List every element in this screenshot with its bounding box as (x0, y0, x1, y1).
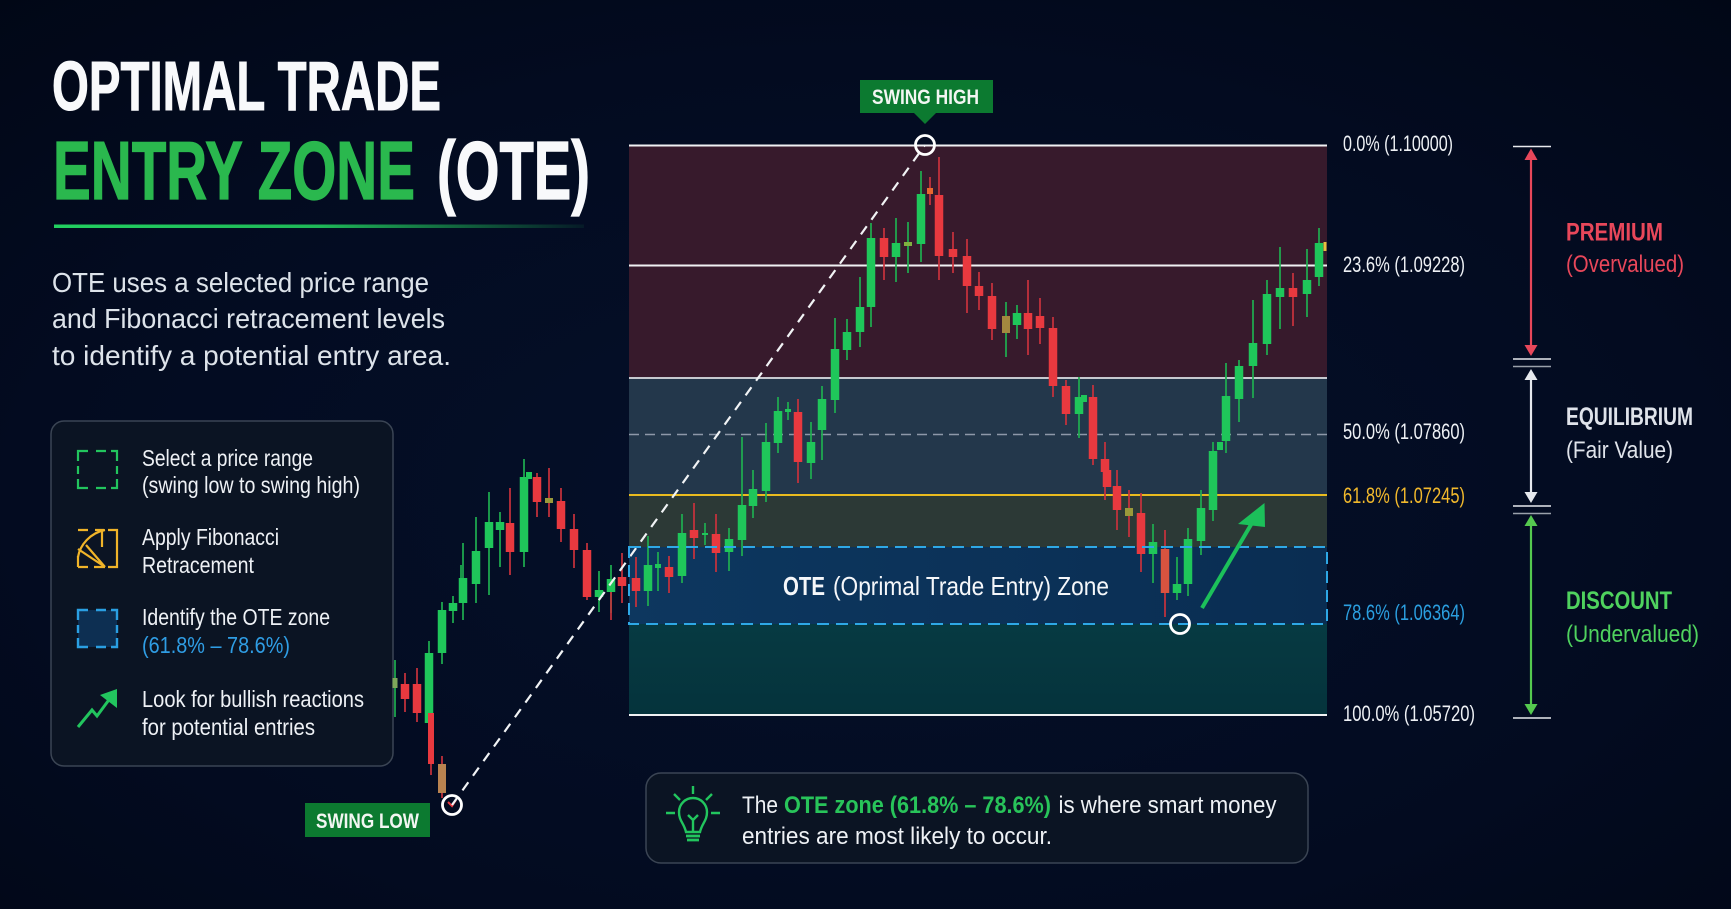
fibonacci level labels: 23.6% (1.09228) (1343, 252, 1465, 277)
intro text: to identify a potential entry area. (52, 340, 451, 371)
step 2 text: Retracement (142, 552, 255, 578)
intro text: and Fibonacci retracement levels (52, 303, 445, 334)
callout text: is where smart money (1058, 792, 1276, 819)
range brackets (1513, 146, 1551, 718)
title (52, 47, 590, 217)
callout (646, 773, 1308, 863)
marker: swing high (916, 136, 934, 154)
OTE zone label: (Oprimal Trade Entry) Zone (833, 571, 1109, 601)
arrow: premium range (1524, 148, 1538, 356)
title: (OTE) (437, 124, 590, 217)
OTE zone label: OTE (783, 571, 825, 601)
fibonacci level labels: 0.0% (1.10000) (1343, 131, 1453, 156)
swing low label (305, 803, 430, 837)
fibonacci level labels (1343, 131, 1475, 726)
fibonacci zones (629, 146, 1327, 715)
callout text: The (742, 792, 778, 819)
step 3 text (142, 604, 330, 658)
candlestick chart (395, 157, 1325, 806)
marker: swing low (442, 796, 462, 814)
step 2 text (142, 524, 279, 578)
swing high label (860, 80, 993, 124)
discount label: (Undervalued) (1566, 621, 1699, 648)
intro text: OTE uses a selected price range (52, 267, 429, 298)
premium label (1566, 218, 1684, 278)
swing low to swing high dashed line (452, 145, 925, 805)
step 1 text: Select a price range (142, 445, 313, 471)
fibonacci level labels: 61.8% (1.07245) (1343, 483, 1465, 508)
fibonacci level labels: 78.6% (1.06364) (1343, 600, 1465, 625)
fibonacci level labels: 50.0% (1.07860) (1343, 419, 1465, 444)
arrow: equilibrium range (1524, 369, 1538, 503)
step 4 text: for potential entries (142, 714, 315, 740)
title underline (54, 224, 584, 228)
discount label (1566, 587, 1699, 648)
swing high label: SWING HIGH (872, 86, 979, 109)
step 4 text: Look for bullish reactions (142, 686, 364, 712)
icon: lightbulb (666, 786, 720, 840)
step 2 text: Apply Fibonacci (142, 524, 279, 550)
icon: green dashed range box (78, 451, 117, 488)
step 1 text (142, 445, 360, 498)
bullish reaction arrow (1202, 503, 1265, 608)
marker: OTE low (1170, 614, 1190, 634)
premium label: (Overvalued) (1566, 251, 1684, 278)
intro text (52, 267, 451, 371)
icon: bullish arrow (78, 689, 117, 727)
swing low label: SWING LOW (316, 810, 419, 833)
step 1 text: (swing low to swing high) (142, 472, 360, 498)
step 3 text: (61.8% – 78.6%) (142, 632, 290, 658)
callout text: OTE zone (61.8% – 78.6%) (784, 792, 1051, 819)
equilibrium label: (Fair Value) (1566, 437, 1673, 464)
OTE zone dashed outline (629, 547, 1327, 624)
title: OPTIMAL TRADE (52, 47, 441, 125)
step 3 text: Identify the OTE zone (142, 604, 330, 630)
title: ENTRY ZONE (53, 124, 415, 217)
fibonacci level lines (629, 146, 1327, 715)
icon: fibonacci retracement (78, 530, 117, 567)
equilibrium label: EQUILIBRIUM (1566, 403, 1693, 431)
equilibrium label (1566, 403, 1693, 464)
icon: blue OTE zone box (78, 610, 117, 647)
premium label: PREMIUM (1566, 218, 1663, 246)
discount label: DISCOUNT (1566, 587, 1672, 615)
callout text: entries are most likely to occur. (742, 823, 1052, 850)
callout text (742, 792, 1276, 850)
arrow: discount range (1524, 515, 1538, 715)
fibonacci level labels: 100.0% (1.05720) (1343, 701, 1475, 726)
panel: steps (51, 421, 393, 766)
step 4 text (142, 686, 364, 740)
